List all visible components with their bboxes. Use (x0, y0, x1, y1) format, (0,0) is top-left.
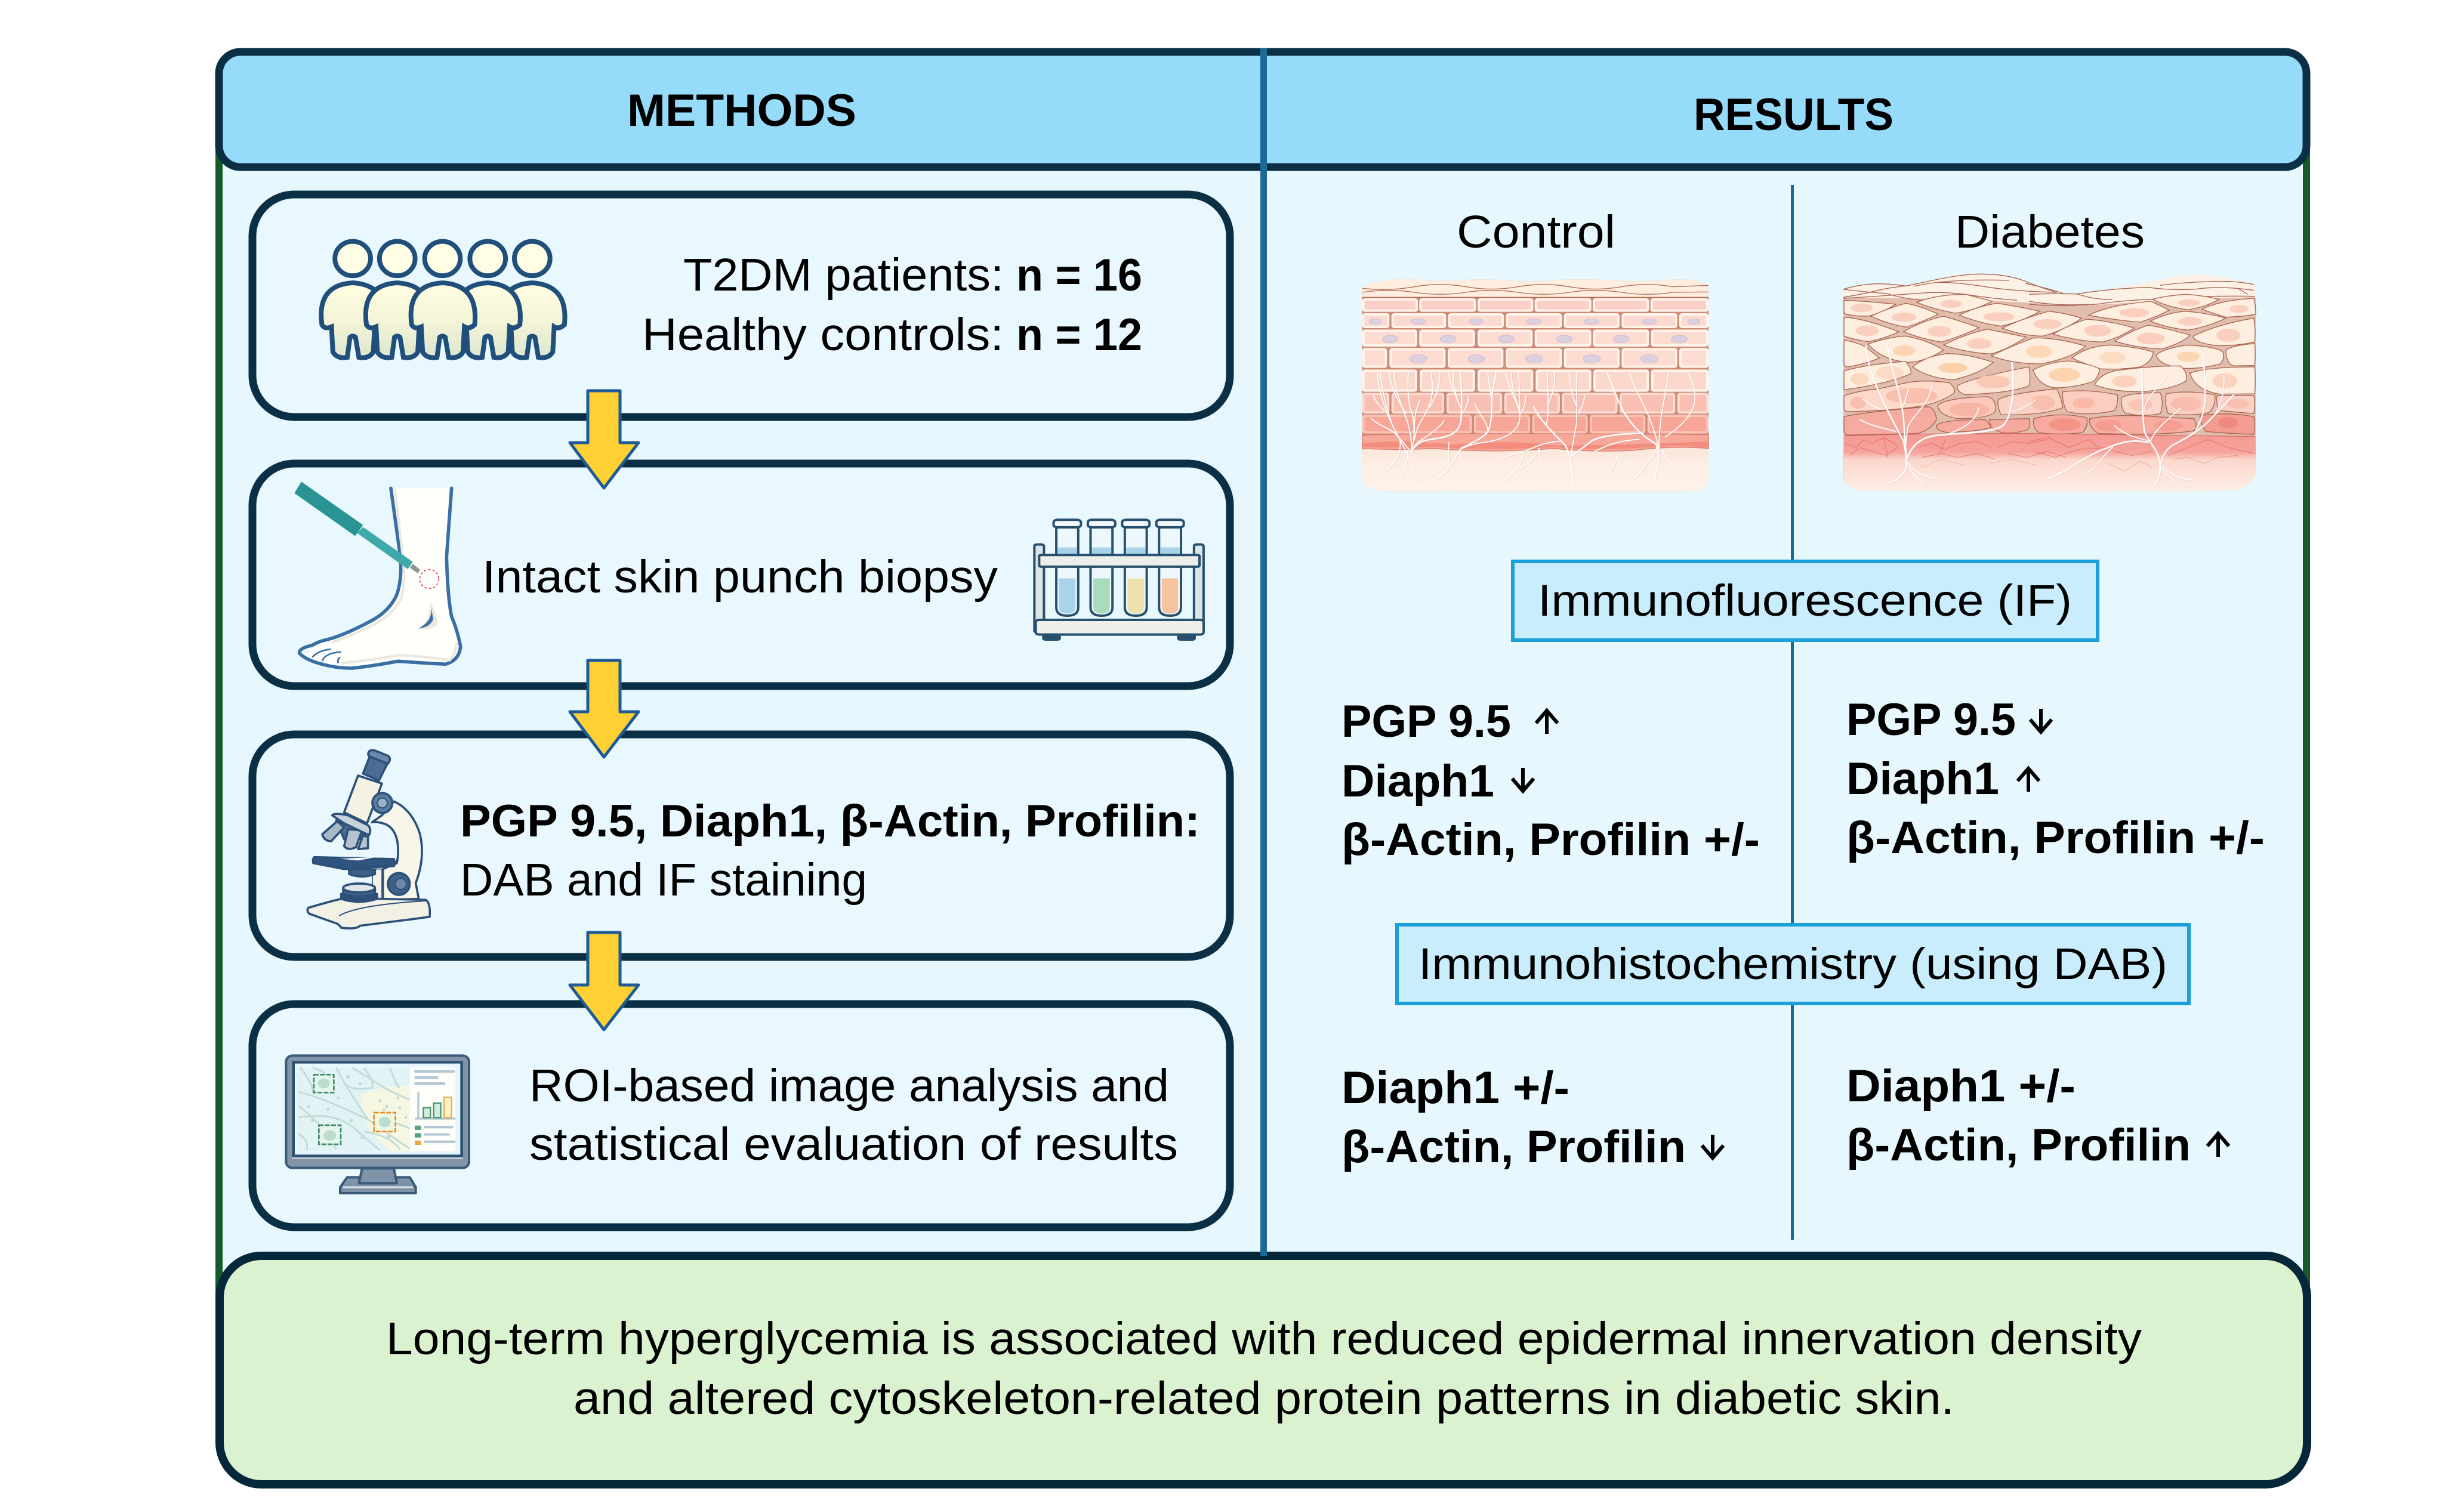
heading: control: Control (1457, 206, 1615, 258)
arrow: up (1536, 711, 1558, 734)
label: immunofluorescence: Immunofluorescence (IF) (1538, 576, 2072, 625)
text: IF control results (1342, 696, 1760, 865)
label: immunohistochemistry (1397, 925, 2189, 1003)
arrow: up (2207, 1134, 2229, 1157)
heading: results: RESULTS (1694, 89, 1894, 140)
icon: computer monitor (286, 1055, 469, 1193)
text: controls n: n = 12 (1016, 310, 1142, 360)
panel: header bar (219, 52, 2306, 167)
icon: group of people (321, 242, 565, 358)
text: IF control results: β-Actin, Profilin +/- (1342, 814, 1760, 865)
panel: step 1 participants (252, 194, 1230, 417)
text: DAB control results (1342, 1063, 1723, 1172)
panel: outer frame (219, 60, 2306, 1330)
text: biopsy: Intact skin punch biopsy (482, 551, 998, 603)
icon: test tubes in rack (1034, 520, 1204, 640)
text: IF diabetes results: β-Actin, Profilin +/- (1846, 813, 2265, 863)
text: DAB control results: β-Actin, Profilin (1342, 1122, 1686, 1172)
illustration: control skin (1362, 279, 1709, 491)
panel: conclusion (220, 1256, 2307, 1484)
text: IF diabetes results (1846, 694, 2265, 863)
illustration: diabetes skin (1843, 274, 2256, 492)
text: DAB diabetes results: β-Actin, Profilin (1846, 1120, 2191, 1171)
arrow: step 2 to 3 (570, 660, 639, 757)
panel: step 4 analysis (252, 1004, 1230, 1227)
arrow: up (2018, 768, 2039, 792)
text: DAB diabetes results (1846, 1061, 2229, 1171)
panel: step 3 staining (252, 734, 1230, 957)
heading: methods: METHODS (627, 85, 856, 136)
divider: control vs diabetes (1791, 185, 1794, 1240)
panel: conclusion: and altered cytoskeleton-related protein patterns in diabetic skin. (573, 1373, 1954, 1424)
text: IF diabetes results: PGP 9.5 (1846, 694, 2016, 745)
divider: methods vs results (1260, 48, 1267, 1256)
text: DAB diabetes results: Diaph1 +/- (1846, 1061, 2076, 1111)
text: patients n: n = 16 (1016, 250, 1142, 301)
text: markers: PGP 9.5, Diaph1, β-Actin, Profilin: (460, 796, 1200, 847)
text: DAB control results: Diaph1 +/- (1342, 1063, 1569, 1113)
arrow: step 3 to 4 (570, 932, 639, 1030)
text: staining: DAB and IF staining (460, 854, 867, 906)
text: IF control results: PGP 9.5 (1342, 696, 1511, 747)
label: immunofluorescence (1513, 561, 2098, 640)
text: analysis line 2: statistical evaluation of results (529, 1119, 1178, 1170)
icon: leg and punch needle (294, 481, 461, 668)
arrow: step 1 to 2 (570, 391, 639, 488)
text: controls count: Healthy controls: (642, 309, 1004, 360)
text: IF diabetes results: Diaph1 (1846, 753, 1999, 804)
arrow: down (1702, 1135, 1723, 1158)
icon: microscope (307, 750, 430, 928)
arrow: down (2030, 709, 2052, 732)
arrow: down (1512, 768, 1534, 791)
label: immunohistochemistry: Immunohistochemistry (using DAB) (1418, 939, 2167, 989)
panel: step 2 biopsy (252, 464, 1230, 686)
text: patients count: T2DM patients: (683, 249, 1004, 301)
text: analysis line 1: ROI-based image analysis and (529, 1060, 1169, 1111)
heading: diabetes: Diabetes (1955, 206, 2145, 258)
text: IF control results: Diaph1 (1342, 756, 1494, 807)
panel: conclusion: Long-term hyperglycemia is associated with reduced epidermal innervation density (386, 1313, 2142, 1364)
